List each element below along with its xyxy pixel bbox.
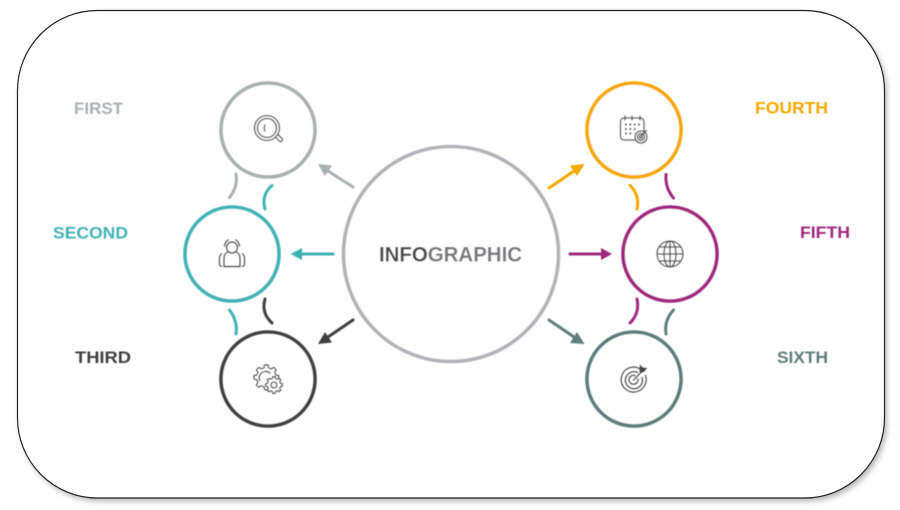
- node: third: [221, 332, 315, 426]
- label: fourth: FOURTH: [755, 98, 828, 118]
- label: first: FIRST: [74, 99, 124, 118]
- node: fourth: [587, 83, 681, 177]
- title: INFOGRAPHIC: [379, 244, 522, 266]
- arrow: to first: [318, 164, 353, 187]
- icon: gears: [254, 365, 282, 393]
- icon: target: [621, 366, 646, 392]
- label: fifth: FIFTH: [800, 223, 850, 242]
- arrow: to third: [318, 320, 353, 344]
- icon: calendar with target: [620, 116, 647, 143]
- node: second: [185, 207, 279, 301]
- arrow: to sixth: [549, 320, 584, 344]
- icon: magnifier: [254, 116, 282, 142]
- node: sixth: [587, 332, 681, 426]
- connector arcs: [230, 174, 674, 334]
- arrow: to fourth: [549, 164, 584, 188]
- label: third: THIRD: [75, 348, 131, 367]
- diagram: [53, 83, 850, 426]
- label: sixth: SIXTH: [777, 348, 828, 367]
- icon: people: [220, 240, 244, 266]
- node: fifth: [623, 207, 717, 301]
- arrow: to fifth: [570, 248, 612, 260]
- central circle: [344, 146, 558, 362]
- icon: globe: [657, 241, 683, 267]
- node: first: [221, 83, 315, 177]
- label: second: SECOND: [53, 224, 128, 242]
- arrow: to second: [290, 248, 333, 260]
